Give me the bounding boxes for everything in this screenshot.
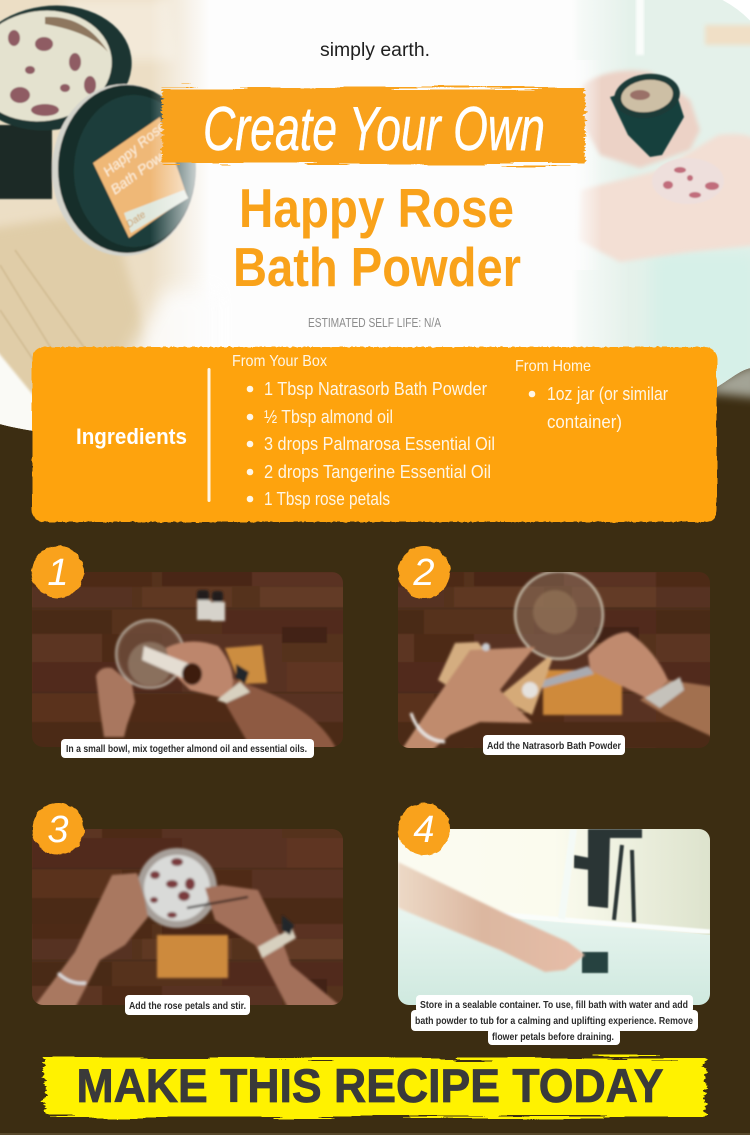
banner script title: Create Your Own [203, 95, 545, 164]
badge 4 [398, 803, 450, 855]
list: from your box [232, 353, 495, 509]
header photo area [0, 0, 750, 460]
list: from your box: 2 drops Tangerine Essential Oil [264, 462, 491, 482]
caption 4: bath powder to tub for a calming and uplifting experience. Remove [415, 1015, 693, 1027]
step 2 photo [392, 566, 716, 754]
panel: ingredients [32, 347, 717, 522]
call to action banner: MAKE THIS RECIPE TODAY [76, 1059, 664, 1112]
soft shadow edge of header [700, 364, 750, 398]
caption 2: Add the Natrasorb Bath Powder [487, 740, 621, 752]
badge 3: 3 [47, 809, 69, 851]
badge 2: 2 [412, 552, 435, 594]
fade of left photo [152, 0, 209, 348]
photo: hands with jar over bath [580, 0, 750, 387]
shelf life note: ESTIMATED SELF LIFE: N/A [308, 316, 442, 330]
brand logo: simply earth. [320, 40, 430, 61]
caption 1 [61, 739, 314, 758]
main title: Bath Powder [233, 236, 521, 298]
list: from your box: 3 drops Palmarosa Essential Oil [264, 434, 495, 454]
list: from home: From Home [515, 358, 591, 375]
step 4 photo [398, 829, 710, 1005]
jar label text: Happy Rose [100, 117, 169, 179]
list: from home [515, 358, 668, 432]
jar label date: Date [124, 209, 148, 230]
caption 3 [125, 995, 250, 1015]
badge 1 [32, 546, 84, 598]
divider [208, 368, 210, 502]
badge 4: 4 [413, 809, 435, 851]
orange brush banner [162, 88, 585, 164]
main title: Happy Rose [239, 177, 514, 239]
list: from your box: 1 Tbsp Natrasorb Bath Powder [264, 379, 487, 399]
list: from your box: ½ Tbsp almond oil [264, 407, 393, 427]
badge 1: 1 [47, 552, 69, 594]
jar label text [103, 122, 164, 196]
step 1 photo [32, 572, 343, 747]
caption 4: Store in a sealable container. To use, fill bath with water and add [420, 999, 688, 1011]
caption 4 [411, 995, 698, 1045]
fade on hands [576, 78, 598, 248]
caption 2 [483, 735, 625, 755]
list: from your box: From Your Box [232, 353, 327, 370]
caption 1: In a small bowl, mix together almond oil and essential oils. [66, 743, 307, 755]
jar label text: Bath Powder [107, 137, 183, 197]
ingredients heading: Ingredients [76, 424, 187, 449]
list: from home: container) [547, 412, 622, 432]
step 3 photo [26, 823, 349, 1011]
main title [233, 177, 521, 298]
caption 3: Add the rose petals and stir. [129, 1000, 246, 1012]
list: from your box: 1 Tbsp rose petals [264, 489, 390, 509]
badge 3 [32, 803, 84, 855]
photo: jars on wood board [0, 0, 202, 431]
badge 2 [398, 546, 450, 598]
list: from home: 1oz jar (or similar [547, 384, 668, 404]
caption 4: flower petals before draining. [492, 1031, 614, 1043]
